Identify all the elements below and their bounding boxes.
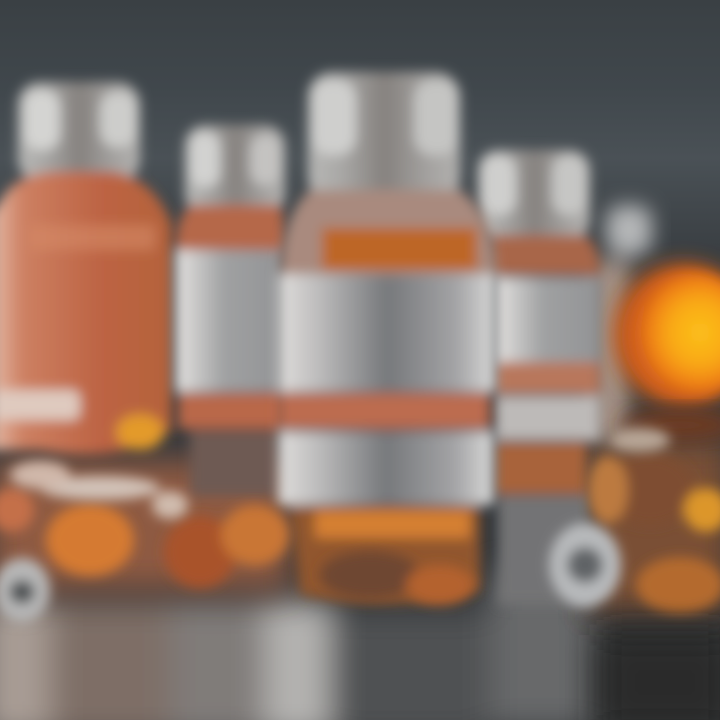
white pills in front bbox=[0, 428, 670, 622]
bottle 5: small back bottle bbox=[590, 205, 652, 440]
bottle 2: second bottle bbox=[175, 125, 285, 496]
warm base behind pills bbox=[0, 440, 720, 610]
orange pills in front bbox=[0, 454, 720, 613]
bottle 1: left orange bottle bbox=[0, 82, 172, 454]
bottle 4: fourth bottle bbox=[478, 150, 600, 605]
soft vignette on lower right bbox=[600, 635, 720, 720]
bottle 3: central large bottle bbox=[278, 72, 497, 604]
floor reflection bbox=[0, 570, 720, 720]
orange glowing sphere bbox=[612, 263, 720, 441]
